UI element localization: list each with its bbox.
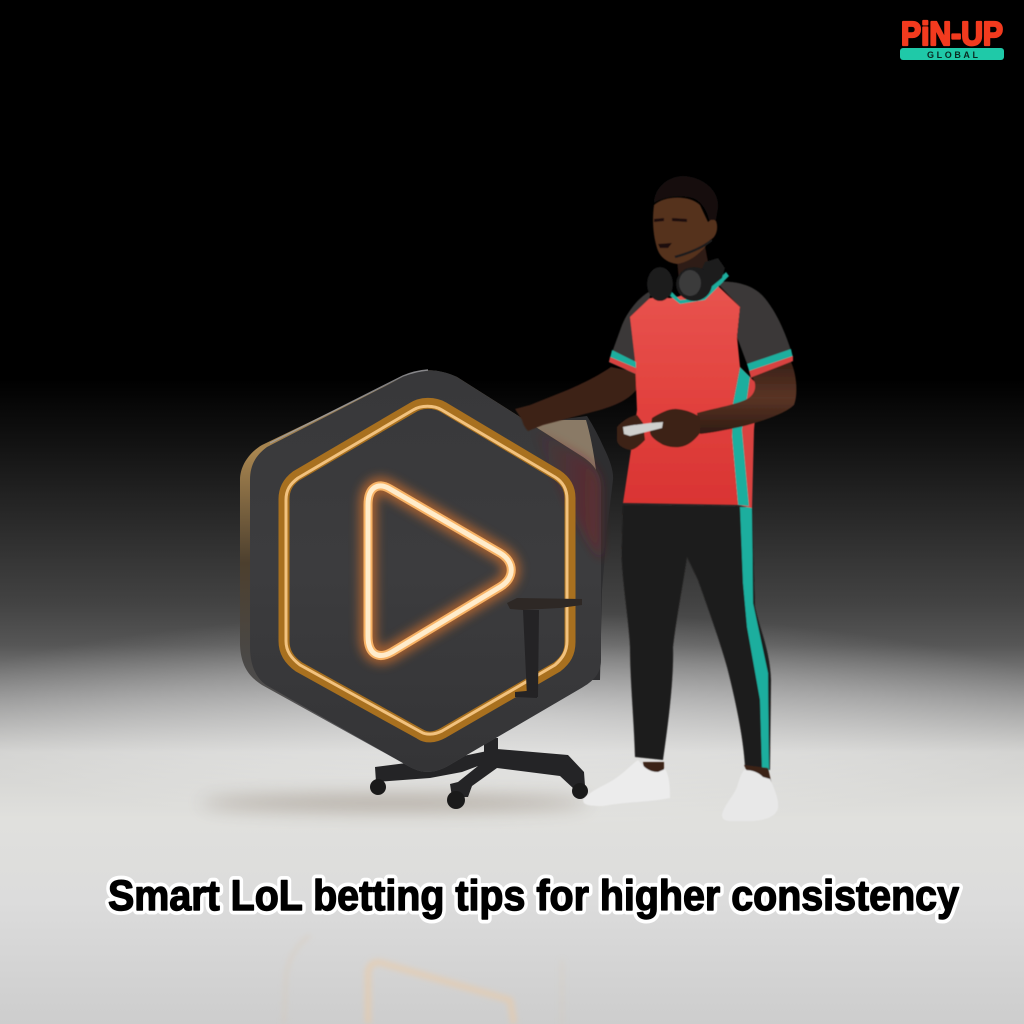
right sneaker (722, 770, 778, 821)
chair base and casters (370, 738, 588, 809)
game controller (623, 422, 663, 436)
hexagon play badge (240, 370, 601, 772)
left grey sleeve (610, 290, 652, 372)
neon hexagon ring (284, 403, 570, 737)
chair armrest (507, 598, 582, 698)
right grey sleeve (716, 282, 793, 372)
left hand (617, 415, 645, 450)
logo teal bar (900, 48, 1004, 60)
logo: Pin-Up Global (900, 15, 1004, 60)
office chair (370, 416, 613, 809)
trousers (622, 505, 771, 770)
left ankle (643, 762, 664, 776)
left sleeve cuff (609, 350, 636, 374)
neck (677, 246, 710, 292)
right arm (697, 362, 796, 434)
hexagon side edge (240, 370, 598, 772)
chair back frame (540, 416, 613, 680)
floor reflection of the hexagon and play icon (284, 935, 562, 1024)
top highlight (270, 370, 428, 443)
hexagon front face (250, 370, 601, 772)
teal trouser stripe (740, 507, 769, 770)
play triangle neon core (368, 486, 511, 655)
right sleeve cuff (747, 349, 793, 377)
logo subtitle: GLOBAL (927, 50, 978, 60)
floor shadow under hexagon and chair (200, 795, 590, 811)
shirt red side panel (732, 367, 758, 508)
teal side panel (732, 367, 750, 506)
face (653, 198, 717, 264)
play triangle neon tube (368, 486, 511, 655)
person: gamer with headset and controller (515, 176, 796, 821)
right hand (650, 409, 700, 447)
logo wordmark: PiN-UP (901, 15, 1003, 52)
headphones (647, 258, 725, 301)
eyebrows, eyes and mouth (654, 218, 687, 248)
teal collar (670, 272, 729, 304)
left arm reaching to hexagon (515, 367, 636, 431)
title caption: Smart LoL betting tips for higher consistency (108, 872, 959, 920)
hair (654, 176, 718, 220)
headset microphone (675, 240, 712, 257)
title caption: Smart LoL betting tips for higher consistency (108, 872, 959, 920)
play triangle neon glow (368, 486, 511, 655)
red shirt torso (623, 285, 740, 505)
left sneaker (583, 760, 670, 806)
chair back tan inner (530, 420, 596, 490)
red reflection on the right of the face (530, 425, 601, 560)
right ankle (744, 765, 772, 785)
